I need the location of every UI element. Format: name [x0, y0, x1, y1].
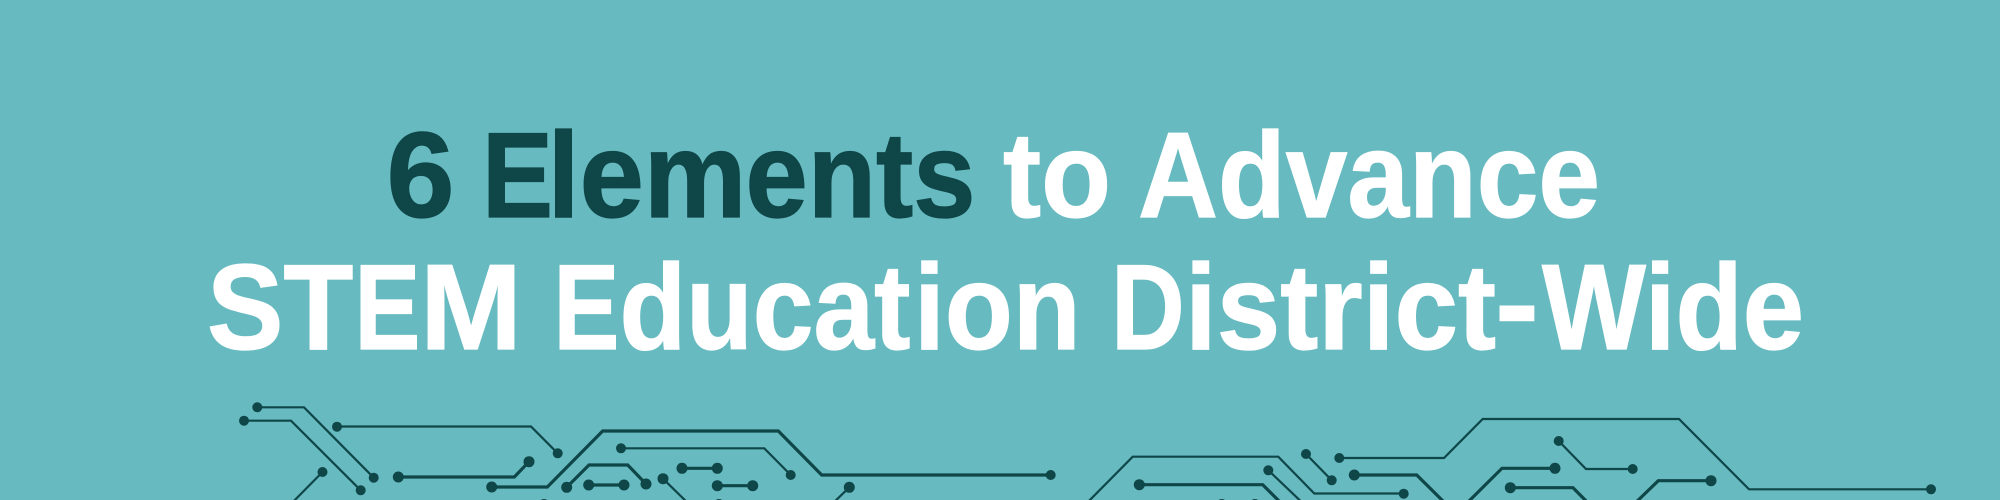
title line 1 — [386, 107, 1600, 243]
title line 2: ion — [914, 239, 1081, 375]
title line 2: ST — [207, 239, 353, 375]
title line 2: D — [1111, 239, 1185, 375]
title line 1: to — [1003, 107, 1111, 243]
title — [207, 107, 1804, 375]
title line 2: ducat — [620, 239, 910, 375]
title line 2: E — [553, 239, 619, 375]
title line 2: M — [420, 239, 522, 375]
title line 2: Wide — [1542, 239, 1804, 375]
title line 2: E — [354, 239, 420, 375]
title line 1: E — [482, 107, 553, 243]
title line 1: ents — [746, 107, 976, 243]
circuit traces: right cluster — [1080, 419, 1936, 500]
title line 2 — [207, 235, 1804, 375]
title line 2: istrict — [1185, 239, 1496, 375]
title line 1: lem — [548, 107, 746, 243]
circuit traces: left cluster — [239, 402, 1056, 500]
title line 2: - — [1495, 235, 1539, 371]
title line 1: Advance — [1138, 107, 1600, 243]
title line 1: 6 — [386, 107, 454, 243]
